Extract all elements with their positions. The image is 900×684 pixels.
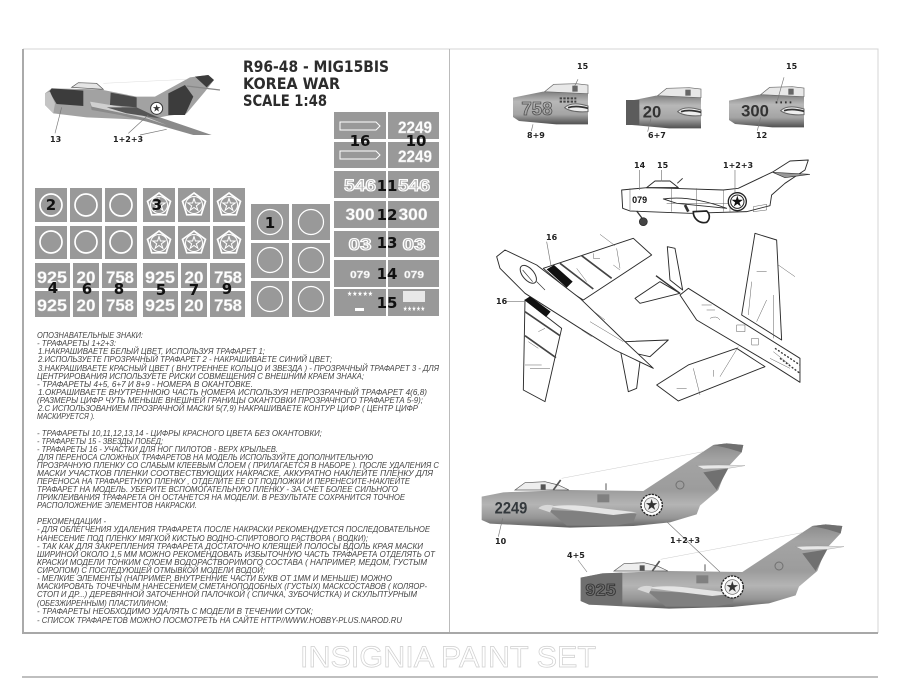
stencil number labels: 15 xyxy=(377,294,397,312)
stencil number labels: 2 xyxy=(46,196,56,214)
stencil number labels: 12 xyxy=(377,206,397,224)
stencil group: numbers 10 to 16: 079 xyxy=(404,270,425,281)
stencil group: numbers 10 to 16: 03 xyxy=(348,235,372,254)
camouflaged side view 925: 925 xyxy=(585,580,616,599)
stencil number labels: 8 xyxy=(114,280,124,298)
stencil number labels: 6 xyxy=(82,280,92,298)
instructions text block: (ОБЕЗЖИРЕННЫМ) ПЛАСТИЛИНОМ; xyxy=(37,598,169,608)
stencil group: numbers 10 to 16: 300 xyxy=(346,205,374,224)
stencil number labels: 3 xyxy=(152,196,162,214)
stencil group: rings 2 and numbers 4, 6, 8: 20 xyxy=(77,296,95,315)
instructions text block: - ТРАФАРЕТЫ 15 - ЗВЕЗДЫ ПОБЕД; xyxy=(37,436,164,446)
instructions text block: МАСКИРУЕТСЯ ). xyxy=(37,411,95,421)
instructions text block: ПРИКЛЕИВАНИЯ ТРАФАРЕТА ОН ОСТАНЕТСЯ НА МОДЕЛИ. В РЕЗУЛЬТАТЕ СОХРАНИТСЯ ТОЧНОЕ xyxy=(37,492,405,502)
nose closeup 20: 20 xyxy=(643,103,661,122)
stencil group: numbers 10 to 16: 300 xyxy=(398,205,428,224)
labels: nose closeups xyxy=(527,62,798,140)
stencil group: emblems 3 and numbers 5, 7, 9: 758 xyxy=(214,268,242,287)
instructions text block: 1.ОКРАШИВАЕТЕ ВНУТРЕННЮЮ ЧАСТЬ НОМЕРА ИСПОЛЬЗУЯ НЕПРОЗРАЧНЫЙ ТРАФАРЕТ 4(6,8) xyxy=(38,386,427,397)
leader lines and labels: lower planes xyxy=(495,522,720,572)
title xyxy=(243,57,389,110)
leader lines and labels: lower planes: 10 xyxy=(495,537,507,546)
instructions text block: МАСКИ УЧАСТКОВ ПЛЕНКИ СООТВЕСТВУЮЩИХ НАКРАСКЕ, АККУРАТНО НАКЛЕЙТЕ ПЛЕНКУ ДЛЯ xyxy=(37,467,433,478)
stencil group: emblems 3 and numbers 5, 7, 9: 925 xyxy=(145,296,175,315)
label: top-left plane: 1+2+3 xyxy=(113,135,143,144)
stencil number labels: 7 xyxy=(189,281,199,299)
instructions text block: - ДЛЯ ОБЛЕГЧЕНИЯ УДАЛЕНИЯ ТРАФАРЕТА ПОСЛЕ НАКРАСКИ РЕКОМЕНДУЕТСЯ ПОСЛЕДОВАТЕЛЬНОЕ xyxy=(37,524,430,534)
camouflaged side view 2249 xyxy=(482,443,745,537)
line drawing side view 079: 079 xyxy=(632,195,647,205)
stencil group: numbers 10 to 16: 546 xyxy=(344,176,376,195)
stencil number labels: 4 xyxy=(48,279,58,297)
stencil group: numbers 10 to 16: 2249 xyxy=(398,147,432,166)
camouflaged side view 925 xyxy=(581,524,844,609)
stencil group: rings 2 and numbers 4, 6, 8: 925 xyxy=(37,296,67,315)
instructions text block: 3.НАКРАШИВАЕТЕ КРАСНЫЙ ЦВЕТ ( ВНУТРЕННЕЕ КОЛЬЦО И ЗВЕЗДА ) - ПРОЗРАЧНЫЙ ТРАФАРЕТ 3 - ДЛЯ xyxy=(38,362,439,373)
instructions text block xyxy=(37,330,440,625)
nose closeup 20 xyxy=(626,88,701,132)
nose closeup 758 xyxy=(513,79,588,131)
stencil number labels: 14 xyxy=(377,265,397,283)
instructions text block: (РАЗМЕРЫ ЦИФР ЧУТЬ МЕНЬШЕ ВНЕШНЕЙ ГРАНИЦЫ ОКАНТОВКИ ПРОЗРАЧНОГО ТРАФАРЕТА 5-9); xyxy=(37,394,424,405)
stencil group: numbers 10 to 16: 2249 xyxy=(398,118,432,137)
labels: nose closeups: 6+7 xyxy=(648,131,666,140)
leader lines and labels: lower planes: 4+5 xyxy=(567,551,585,560)
footer title: INSIGNIA PAINT SET xyxy=(300,641,596,674)
underside view plane xyxy=(635,233,800,401)
instructions text block: - МЕЛКИЕ ЭЛЕМЕНТЫ (НАПРИМЕР, ВНУТРЕННИЕ ЧАСТИ БУКВ ОТ 1ММ И МЕНЬШЕ) МОЖНО xyxy=(37,573,393,583)
stencil number labels: 1 xyxy=(265,214,275,232)
instructions text block: ТРАФАРЕТ НА МОДЕЛЬ. УБЕРИТЕ ВСПОМОГАТЕЛЬНУЮ ПЛЕНКУ - ЗА СЧЕТ БОЛЕЕ СИЛЬНОГО xyxy=(37,484,399,494)
instructions text block: ДЛЯ ПЕРЕНОСА СЛОЖНЫХ ТРАФАРЕТОВ НА МОДЕЛЬ ИСПОЛЬЗУЙТЕ ДОПОЛНИТЕЛЬНУЮ xyxy=(37,451,373,462)
stencil number labels: 10 xyxy=(406,132,426,150)
stencil group: numbers 10 to 16: 03 xyxy=(402,235,426,254)
stencil group: rings 2 and numbers 4, 6, 8: 758 xyxy=(106,296,134,315)
stencil group: rings 2 and numbers 4, 6, 8: 20 xyxy=(77,268,95,287)
stencil number labels: 5 xyxy=(156,281,166,299)
instructions text block: - ТАК КАК ДЛЯ ЗАКРЕПЛЕНИЯ ТРАФАРЕТА ДОСТАТОЧНО КЛЕЯЩЕЙ ПОЛОСЫ ВДОЛЬ КРАЯ МАСКИ xyxy=(37,540,423,551)
instructions text block: РАСПОЛОЖЕНИЕ ЭЛЕМЕНТОВ НАКРАСКИ. xyxy=(37,500,197,510)
labels: walkway 16: 16 xyxy=(546,233,558,242)
instructions text block: ШИРИНОЙ ОКОЛО 1,5 ММ МОЖНО РЕКОМЕНДОВАТЬ ИЗБЫТОЧНУЮ ЧАСТЬ ТРАФАРЕТА ОТДЕЛЯТЬ ОТ xyxy=(37,548,436,559)
stencil group: numbers 10 to 16: 546 xyxy=(398,176,430,195)
instructions text block: ЦЕНТРИРОВАНИЯ ИСПОЛЬЗУЕТЕ РИСКИ СОВМЕЩЕНИЯ С ВНЕШНИМ КРАЕМ ЗНАКА; xyxy=(37,371,365,381)
labels: nose closeups: 15 xyxy=(786,62,798,71)
labels: walkway 16: 16 xyxy=(496,297,508,306)
labels: nose closeups: 8+9 xyxy=(527,131,545,140)
instructions text block: ОПОЗНАВАТЕЛЬНЫЕ ЗНАКИ: xyxy=(37,330,143,340)
stencil number labels: 13 xyxy=(377,234,397,252)
label: top-left plane: 13 xyxy=(50,135,61,144)
stencil group: numbers 10 to 16: ★★★★★ xyxy=(347,290,373,298)
title: SCALE 1:48 xyxy=(243,91,327,110)
stencil group: numbers 10 to 16 xyxy=(334,112,439,316)
stencil group: rings 2 and numbers 4, 6, 8 xyxy=(35,188,137,317)
labels: side view 079: 1+2+3 xyxy=(723,161,753,170)
labels: walkway 16 xyxy=(496,233,558,306)
instructions text block: ПРОЗРАЧНУЮ ПЛЕНКУ СО СЛАБЫМ КЛЕЕВЫМ СЛОЕМ ( ПРИЛАГАЕТСЯ В НАБОРЕ ). ПОСЛЕ УДАЛЕНИЯ С xyxy=(37,460,440,470)
labels: nose closeups: 15 xyxy=(577,62,589,71)
instructions text block: - ТРАФАРЕТЫ 10,11,12,13,14 - ЦИФРЫ КРАСНОГО ЦВЕТА БЕЗ ОКАНТОВКИ; xyxy=(37,428,323,438)
instructions text block: - СПИСОК ТРАФАРЕТОВ МОЖНО ПОСМОТРЕТЬ НА САЙТЕ HTTP//WWW.HOBBY-PLUS.NAROD.RU xyxy=(37,614,403,625)
instructions text block: - ТРАФАРЕТЫ 16 - УЧАСТКИ ДЛЯ НОГ ПИЛОТОВ - ВЕРХ КРЫЛЬЕВ. xyxy=(37,444,278,454)
stencil number labels: 9 xyxy=(222,280,232,298)
stencil group: emblems 3 and numbers 5, 7, 9: 20 xyxy=(185,296,203,315)
stencil number labels: 11 xyxy=(377,177,397,195)
instructions text block: СИРОПОМ) С ПОСЛЕДУЮЩЕЙ ОТМЫВКОЙ МОДЕЛИ ВОДОЙ; xyxy=(37,564,266,575)
label: top-left plane xyxy=(50,135,143,144)
leader lines and labels: lower planes: 1+2+3 xyxy=(670,536,700,545)
camouflaged side view 2249: 2249 xyxy=(495,499,527,518)
title: R96-48 - MIG15BIS xyxy=(243,57,389,76)
instructions text block: - ТРАФАРЕТЫ 4+5, 6+7 И 8+9 - НОМЕРА В ОКАНТОВКЕ. xyxy=(37,379,253,389)
instructions text block: КРАСКИ МОДЕЛИ ТОНКИМ СЛОЕМ ВОДОРАСТВОРИМОГО СОСТАВА ( НАПРИМЕР, МЕДОМ, ГУСТЫМ xyxy=(37,557,427,567)
instructions text block: - ТРАФАРЕТЫ 1+2+3: xyxy=(37,338,116,348)
instructions text block: 1.НАКРАШИВАЕТЕ БЕЛЫЙ ЦВЕТ, ИСПОЛЬЗУЯ ТРАФАРЕТ 1; xyxy=(38,345,266,356)
instructions text block: ПЕРЕНОСА НА ТРАФАРЕТНУЮ ПЛЕНКУ , ОТДЕЛИТЕ ЕЕ ОТ ПОДЛОЖКИ И ПЕРЕНЕСИТЕ-НАКЛЕЙТЕ xyxy=(37,475,410,486)
camouflaged MiG-15 with labels xyxy=(45,75,220,135)
instructions text block: НАНЕСЕНИЕ ПОД ПЛЕНКУ МЯГКОЙ КИСТЬЮ ВОДНО-СПИРТОВОГО РАСТВОРА ( ВОДКИ); xyxy=(37,532,369,543)
instructions text block: РЕКОМЕНДАЦИИ - xyxy=(37,516,106,526)
labels: nose closeups: 12 xyxy=(756,131,767,140)
instructions text block: - ТРАФАРЕТЫ НЕОБХОДИМО УДАЛЯТЬ С МОДЕЛИ В ТЕЧЕНИИ СУТОК; xyxy=(37,606,314,616)
stencil number labels: 16 xyxy=(350,132,370,150)
stencil group: rings 2 and numbers 4, 6, 8: 758 xyxy=(106,268,134,287)
stencil group: numbers 10 to 16: 079 xyxy=(350,270,371,281)
stencil group: emblems 3 and numbers 5, 7, 9 xyxy=(143,188,245,317)
nose closeup 300: 300 xyxy=(741,102,769,121)
stencil group: emblems 3 and numbers 5, 7, 9: 925 xyxy=(145,268,175,287)
nose closeup 758: 758 xyxy=(521,98,553,119)
stencil group: rings 2 and numbers 4, 6, 8: 925 xyxy=(37,268,67,287)
stencil group: emblems 3 and numbers 5, 7, 9: 758 xyxy=(214,296,242,315)
instructions text block: 2.С ИСПОЛЬЗОВАНИЕМ ПРОЗРАЧНОЙ МАСКИ 5(7,9) НАКРАШИВАЕТЕ КОНТУР ЦИФР ( ЦЕНТР ЦИФР xyxy=(37,402,418,413)
instructions text block: МАСКИРОВАТЬ ТОЧЕЧНЫМ НАНЕСЕНИЕМ СМЕТАНОПОДОБНЫХ (ГУСТЫХ) МАСКСОСТАВОВ ( КОЛЯОР- xyxy=(37,581,427,591)
nose closeup 300 xyxy=(729,77,804,131)
stencil group: numbers 10 to 16: ★★★★★ xyxy=(403,305,425,313)
stencil group: rings 1 xyxy=(251,204,330,317)
stencil group: emblems 3 and numbers 5, 7, 9: 20 xyxy=(185,268,203,287)
instructions text block: СТОП И ДР...) ДЕРЕВЯННОЙ ЗАТОЧЕННОЙ ПАЛОЧКОЙ ( СПИЧКА, ЗУБОЧИСТКА) И СКУЛЬПТУРНЫМ xyxy=(37,588,417,599)
top view plane with walkways xyxy=(497,234,668,402)
labels: side view 079: 15 xyxy=(657,161,669,170)
stencil number labels xyxy=(46,132,426,312)
labels: side view 079: 14 xyxy=(634,161,646,170)
title: KOREA WAR xyxy=(243,74,340,93)
labels: side view 079 xyxy=(634,161,753,170)
instructions text block: 2.ИСПОЛЬЗУЕТЕ ПРОЗРАЧНЫЙ ТРАФАРЕТ 2 - НАКРАШИВАЕТЕ СИНИЙ ЦВЕТ; xyxy=(37,353,333,364)
line drawing side view 079 xyxy=(622,160,810,226)
